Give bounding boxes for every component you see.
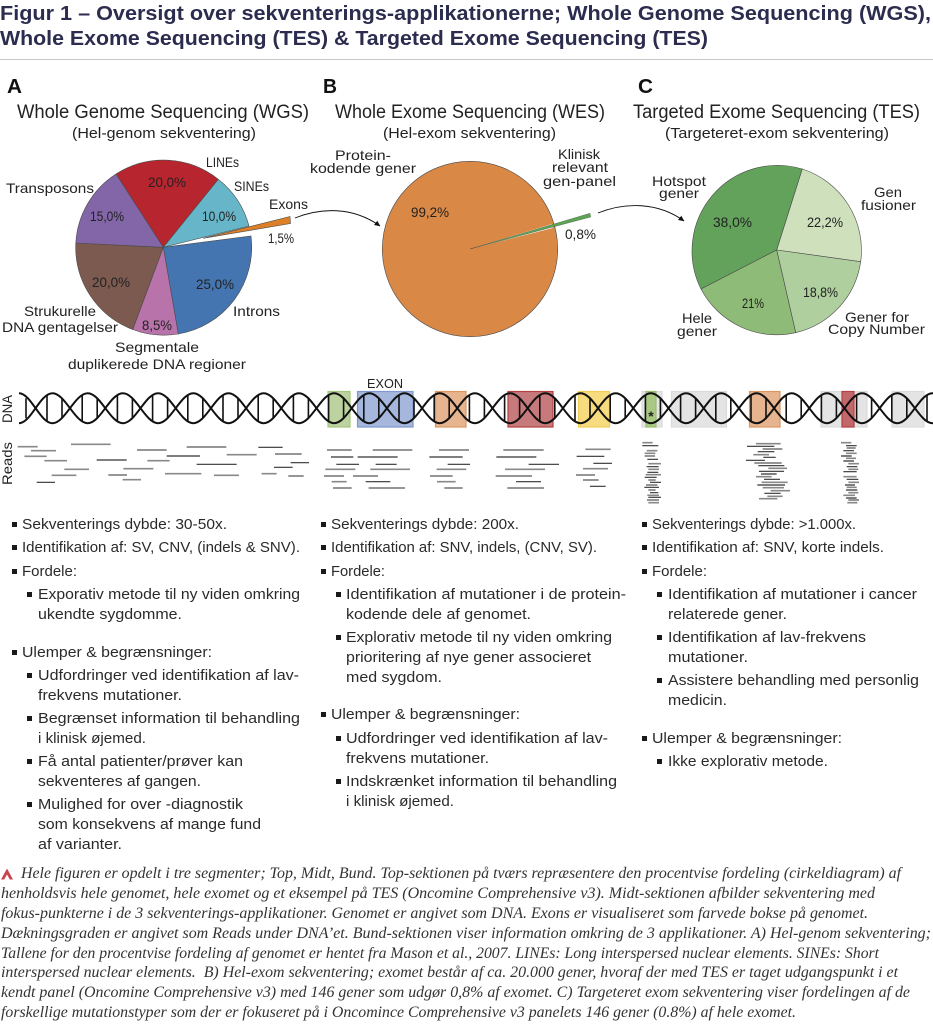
caption (0, 865, 931, 1021)
pie labels A: 20,0% (148, 174, 186, 190)
pie labels C: 38,0% (713, 214, 752, 230)
text block: TES bullets: Identifikation af lav-frekvens (668, 630, 866, 646)
text block: WGS bullets: sekventeres af gangen. (38, 774, 201, 790)
text block: WGS bullets: Identifikation af: SV, CNV, (indels & SNV). (22, 540, 300, 556)
pie labels B: Klinisk (558, 146, 601, 162)
panel: B whole exome sequencing (310, 76, 616, 337)
pie labels A: duplikerede DNA regioner (68, 356, 246, 372)
pie labels A: 20,0% (92, 274, 130, 290)
heading WES (335, 102, 605, 142)
text block: TES bullets: medicin. (668, 693, 727, 709)
text block: WES bullets: med sygdom. (346, 670, 442, 686)
text block: WGS bullets: Få antal patienter/prøver kan (38, 754, 243, 770)
panel: A whole genome sequencing (2, 76, 309, 372)
text block: WES bullets: Sekventerings dybde: 200x. (331, 517, 519, 533)
pie labels C (652, 173, 925, 339)
heading TES: (Targeteret-exom sekventering) (665, 125, 889, 142)
text block: WGS bullets: af varianter. (38, 837, 122, 853)
asterisk marker: * (648, 408, 654, 424)
text block: WGS bullets: Udfordringer ved identifikation af lav- (38, 668, 299, 684)
pie chart: genome (76, 160, 290, 335)
text block: WGS bullets: ukendte sygdomme. (38, 607, 182, 623)
icon: red chevron (1, 868, 13, 880)
text block: WES bullets: Indskrænket information til behandling (346, 774, 617, 790)
heading WES: (Hel-exom sekventering) (383, 125, 556, 142)
pie labels A: Strukurelle (24, 303, 96, 319)
text block: TES bullets: Identifikation af mutationer i cancer (668, 587, 917, 603)
pie labels A: SINEs (234, 178, 269, 194)
pie labels C: fusioner (861, 197, 916, 213)
DNA track with exon boxes (0, 377, 933, 427)
text block: WGS bullets: frekvens mutationer. (38, 688, 182, 704)
text block: TES bullets (642, 517, 919, 770)
caption text: Hele figuren er opdelt i tre segmenter; Top, Midt, Bund. Top-sektionen på tværs repræsentere den procentvise fordeling (cirkeldiagram) af (20, 865, 904, 882)
text block: TES bullets: Assistere behandling med personlig (668, 673, 919, 689)
pie labels A: 1,5% (268, 230, 294, 246)
pie labels B: relevant (552, 159, 608, 175)
title: Figur 1 – Oversigt over sekventerings-applikationerne; Whole Genome Sequencing (WGS), (0, 3, 931, 25)
text block: TES bullets: Fordele: (652, 564, 707, 580)
text block: WGS bullets: Ulemper & begrænsninger: (22, 645, 212, 661)
title: Whole Exome Sequencing (TES) & Targeted Exome Sequencing (TES) (0, 28, 708, 50)
exon boxes (328, 392, 924, 427)
pie labels C: 21% (742, 295, 764, 311)
text block: WGS bullets: Mulighed for over -diagnostik (38, 797, 244, 813)
text block: WGS bullets: Begrænset information til behandling (38, 711, 300, 727)
heading WGS: Whole Genome Sequencing (WGS) (17, 102, 309, 123)
title (0, 3, 931, 50)
text block: WES bullets: Explorativ metode til ny viden omkring (346, 630, 612, 646)
text block: TES bullets: Sekventerings dybde: >1.000x. (652, 517, 856, 533)
pie labels C: Copy Number (828, 321, 925, 337)
text block: WGS bullets (12, 517, 300, 853)
pie labels B: 99,2% (411, 204, 449, 220)
double helix (19, 393, 933, 423)
caption text: Dækningsgraden er angivet som Reads under DNA’et. Bund-sektionen viser information omkring de 3 applikationer. A) Hel-genom sekventering; (0, 925, 931, 942)
text block: TES bullets: Ikke explorativ metode. (668, 754, 828, 770)
heading WES: Whole Exome Sequencing (WES) (335, 102, 605, 123)
reads left and centre (18, 444, 470, 488)
pie chart: exome (382, 161, 591, 337)
reads right and stacks (496, 443, 859, 503)
pie labels C: gener (659, 185, 699, 201)
text block: WES bullets: frekvens mutationer. (346, 751, 489, 767)
reads track (0, 442, 859, 503)
pie labels A: Segmentale (115, 339, 199, 355)
panel: C targeted exome sequencing (633, 76, 925, 339)
pie labels A: 15,0% (90, 208, 124, 224)
text block: TES bullets: Ulemper & begrænsninger: (652, 731, 842, 747)
pie labels B: 0,8% (565, 226, 596, 242)
text block: WGS bullets: som konsekvens af mange fund (38, 817, 261, 833)
text block: WES bullets (321, 517, 626, 810)
heading TES: Targeted Exome Sequencing (TES) (633, 102, 920, 123)
pie labels C: Hotspot (652, 173, 706, 189)
pie labels B: kodende gener (310, 160, 416, 176)
pie labels C: Gener for (845, 309, 909, 325)
pie labels A: 10,0% (202, 208, 236, 224)
text block: WGS bullets: i klinisk øjemed. (38, 731, 146, 747)
exon label: EXON (367, 377, 403, 391)
pie labels B (310, 146, 616, 242)
text block: WES bullets: i klinisk øjemed. (346, 794, 454, 810)
text block: WES bullets: Fordele: (331, 564, 385, 580)
pie labels B: gen-panel (543, 173, 616, 189)
text block: WES bullets: Identifikation af: SNV, indels, (CNV, SV). (331, 540, 597, 556)
text block: TES bullets: relaterede gener. (668, 607, 787, 623)
pie labels A: Introns (233, 303, 280, 319)
panel letter B: B (323, 76, 337, 98)
text block: TES bullets: Identifikation af: SNV, korte indels. (652, 540, 884, 556)
arrow: A to B (295, 211, 380, 226)
pie labels B: Protein- (335, 147, 391, 163)
pie labels A: Exons (269, 196, 308, 212)
pie labels C: 18,8% (803, 284, 838, 300)
pie labels C: gener (677, 323, 717, 339)
text block: WGS bullets: Fordele: (22, 564, 77, 580)
text block: WGS bullets: Sekventerings dybde: 30-50x. (22, 517, 227, 533)
pie labels A: Transposons (6, 180, 94, 196)
text block: WES bullets: prioritering af nye gener associeret (346, 650, 591, 666)
panel letter C: C (638, 76, 653, 98)
caption text: forskellige mutationstyper som der er fokuseret på i Oncomince Comprehensive v3 panelets 146 gener (0.8%) af hele exomet. (1, 1004, 796, 1021)
caption text: henholdsvis hele genomet, hele exomet og et eksempel på TES (Oncomine Comprehensive v3). Midt-sektionen afbilder sekventering med (1, 885, 875, 902)
pie labels A: 25,0% (196, 276, 234, 292)
pie labels A (2, 154, 308, 372)
pie labels C: 22,2% (807, 214, 843, 230)
pie labels C: Gen (874, 184, 902, 200)
heading WGS (17, 102, 309, 142)
pie labels C: Hele (682, 310, 712, 326)
pie labels A: LINEs (206, 154, 239, 170)
text block: TES bullets: mutationer. (668, 650, 748, 666)
caption text: fokus-punkterne i de 3 sekventerings-applikationer. Genomet er angivet som DNA. Exons er visualiseret som farvede bokse på genomet. (1, 905, 868, 922)
text block: WES bullets: Udfordringer ved identifikation af lav- (346, 731, 608, 747)
pie labels A: 8,5% (142, 317, 172, 333)
heading TES (633, 102, 920, 142)
text block: WES bullets: kodende dele af genomet. (346, 607, 531, 623)
panel letter A: A (7, 76, 22, 98)
arrow: B to C (598, 206, 684, 221)
pie labels A: DNA gentagelser (2, 319, 118, 335)
caption text: kendt panel (Oncomine Comprehensive v3) med 146 gener som udgør 0,8% af exomet. C) Targeteret exom sekventering viser fordelingen af de (1, 984, 910, 1001)
text block: WES bullets: Ulemper & begrænsninger: (331, 707, 520, 723)
caption text: Tallene for den procentvise fordeling af genomet er hentet fra Mason et al., 2007. LINEs: Long interspersed nuclear elements. SINEs: Short (1, 945, 880, 962)
pie chart: targeted (692, 165, 861, 335)
caption text: interspersed nuclear elements. B) Hel-exom sekventering; exomet består af ca. 20.000 gener, hvoraf der med TES er taget udgangspunkt i et (1, 964, 899, 981)
text block: WGS bullets: Exporativ metode til ny viden omkring (38, 587, 300, 603)
text block: WES bullets: Identifikation af mutationer i de protein- (346, 587, 626, 603)
caption text (0, 865, 931, 1021)
heading WGS: (Hel-genom sekventering) (72, 125, 256, 142)
